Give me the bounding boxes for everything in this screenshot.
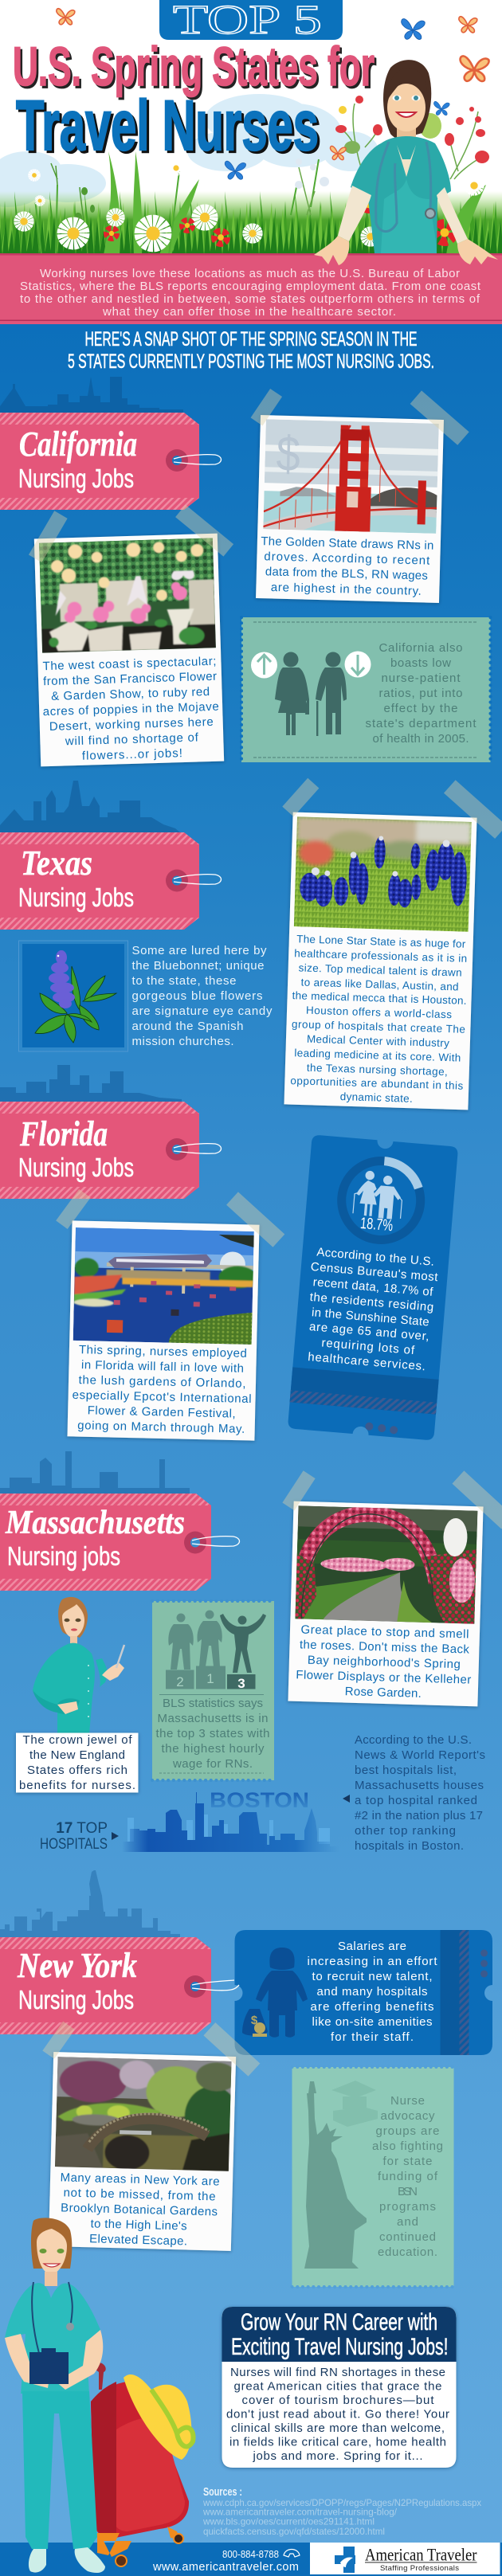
header: white spring meadow panel	[0, 0, 502, 255]
caption: in Florida will fall in love with	[81, 1358, 244, 1376]
advocacy text: advocacy	[381, 2109, 435, 2123]
advocacy text: Nurse	[390, 2094, 425, 2108]
icon: telephone	[284, 2549, 300, 2557]
hospital ranking text: Massachusetts houses	[355, 1779, 484, 1792]
boston skyline with label: BOSTON	[210, 1788, 309, 1812]
donut chart: 18.7%: 18.7%	[359, 1215, 394, 1235]
intro pink band	[0, 253, 502, 324]
sources: Sources :	[203, 2485, 242, 2499]
caption	[296, 1623, 473, 1702]
caption: size. Top medical talent is drawn	[298, 961, 462, 979]
stems and tulips	[295, 96, 489, 215]
icon: podium figures: 3	[237, 1676, 245, 1691]
texas tag	[0, 832, 222, 930]
bluebonnet text: gorgeous blue flowers	[132, 989, 263, 1003]
caption: Medical Center with industry	[307, 1033, 449, 1049]
thread from tag	[192, 1980, 239, 1991]
caption: Desert, working nurses here	[49, 715, 214, 734]
massachusetts tag	[0, 1494, 239, 1591]
caption: the medical mecca that is Houston.	[292, 989, 467, 1007]
bluebonnet text	[132, 944, 273, 1048]
california skyline	[0, 377, 183, 413]
hospital ranking text	[355, 1733, 485, 1853]
caption	[260, 534, 434, 598]
boston skyline with label	[122, 1788, 339, 1852]
hospital ranking text: a top hospital ranked	[355, 1794, 477, 1807]
salaries text: and many hospitals	[317, 1985, 427, 1999]
nurse body	[5, 2218, 105, 2573]
polaroid: flower show	[27, 503, 240, 767]
caption: Great place to stop and smell	[300, 1623, 469, 1642]
caption: to the High Line's	[90, 2217, 187, 2233]
ratio text: effect by the	[384, 702, 457, 715]
top 5 badge	[159, 0, 343, 43]
ticket text	[303, 1245, 440, 1374]
caption: Bay neighborhood's Spring	[308, 1654, 461, 1671]
nurse caption box: The crown jewel of	[22, 1733, 132, 1747]
bluebonnet text: to the state, these	[132, 974, 236, 988]
cta body: in fields like critical care, home health	[229, 2436, 446, 2449]
caption: The west coast is spectacular;	[42, 655, 217, 673]
clouds	[0, 94, 378, 207]
photo: kelleher rose garden	[295, 1505, 478, 1624]
advocacy text: programs	[379, 2200, 436, 2214]
ticket text: healthcare services.	[308, 1350, 426, 1373]
icon: elderly couple	[353, 1169, 404, 1220]
caption	[289, 933, 469, 1106]
icon: nurse and patient figures	[275, 652, 347, 736]
icon: statue of liberty	[304, 2081, 367, 2269]
footer contact	[152, 2548, 300, 2574]
tape	[29, 511, 68, 562]
cta body: jobs and more. Spring for it...	[252, 2449, 422, 2463]
ratio text: boasts low	[390, 656, 451, 670]
ratio text: California also	[379, 641, 462, 655]
advocacy text: funding of	[378, 2170, 438, 2183]
icon: podium figures: 2	[176, 1674, 184, 1689]
icon: blue cross	[335, 2547, 355, 2573]
ticket text: recent data, 18.7% of	[312, 1275, 434, 1299]
butterflies	[57, 9, 489, 179]
arrow: right to boston skyline	[112, 1832, 119, 1840]
caption: the roses. Don't miss the Back	[300, 1638, 470, 1657]
salaries text: are offering benefits	[311, 2000, 433, 2014]
wage text: the top 3 states with	[156, 1727, 269, 1740]
green card: top 3 wage podium	[152, 1601, 274, 1780]
advocacy text: groups are	[376, 2124, 440, 2138]
wage text	[156, 1697, 269, 1771]
travel nurse with luggage illustration	[5, 2218, 194, 2573]
donut chart: 18.7%	[339, 1158, 424, 1243]
texas tag: Nursing Jobs	[18, 883, 134, 912]
ticket text: in the Sunshine State	[311, 1306, 429, 1329]
bluebonnet illustration panel	[19, 941, 273, 1051]
caption: healthcare professionals as it is in	[294, 947, 467, 965]
american traveler logo: American Traveler	[365, 2544, 477, 2565]
title	[13, 36, 376, 167]
ratio text: nurse-patient	[381, 671, 461, 685]
title: Travel Nurses	[16, 85, 319, 165]
ratio text: ratios, put into	[379, 687, 462, 700]
american traveler logo: Staffing Professionals	[380, 2564, 459, 2573]
caption: the Texas nursing shortage,	[307, 1062, 448, 1078]
footer contact: 800-884-8788	[222, 2548, 279, 2560]
ratio text: state's department	[365, 717, 477, 730]
tape	[282, 778, 319, 816]
ratio text	[365, 641, 477, 746]
intro text: Working nurses love these locations as much as the U.S. Bureau of Labor	[40, 267, 460, 280]
advocacy text: education.	[378, 2245, 437, 2259]
advocacy text: continued	[379, 2230, 436, 2244]
ticket text: are age 65 and over,	[308, 1320, 429, 1344]
caption: dynamic state.	[340, 1090, 413, 1105]
tape	[42, 2022, 75, 2059]
hospitals label: 17 TOP	[56, 1820, 108, 1837]
massachusetts tag: Massachusetts	[5, 1505, 185, 1541]
new york tag: New York	[17, 1946, 137, 1985]
luggage	[84, 2363, 194, 2566]
caption: Flower & Garden Festival,	[88, 1403, 236, 1421]
call to action box	[222, 2307, 456, 2468]
green card: nurse-patient ratios	[241, 617, 491, 762]
footer contact: www.americantraveler.com	[152, 2561, 299, 2574]
caption: Houston offers a world-class	[306, 1004, 452, 1020]
bluebonnet text: around the Spanish	[132, 1020, 244, 1033]
hospital ranking text: News & World Report's	[355, 1748, 485, 1762]
hospital ranking text: best hospitals list,	[355, 1764, 457, 1777]
intro text: what they can offer those in the healthcare sector.	[102, 305, 396, 319]
advocacy text: BSN	[398, 2185, 418, 2198]
new york tag: Nursing Jobs	[18, 1985, 134, 2014]
photo: bluebonnet field	[293, 816, 472, 932]
tape	[56, 1189, 91, 1229]
sources: www.americantraveler.com/travel-nursing-blog/	[202, 2506, 398, 2517]
cta heading	[231, 2309, 448, 2360]
wage text: Massachusetts is in	[158, 1712, 268, 1725]
caption: to areas like Dallas, Austin, and	[300, 976, 459, 993]
florida tag	[0, 1102, 222, 1199]
caption: flowers...or jobs!	[82, 746, 182, 763]
caption: leading medicine at its core. With	[294, 1047, 461, 1064]
polaroid: epcot garden	[51, 1188, 285, 1441]
caption: are highest in the country.	[271, 581, 422, 598]
massachusetts skyline	[0, 1451, 190, 1494]
caption: will find no shortage of	[65, 730, 199, 748]
florida tag: Nursing Jobs	[18, 1153, 134, 1182]
hospital ranking text: #2 in the nation plus 17	[355, 1809, 483, 1822]
photo: epcot flower festival	[73, 1227, 254, 1345]
caption: Brooklyn Botanical Gardens	[61, 2201, 218, 2218]
cta body	[226, 2366, 449, 2463]
cta body: Nurses will find RN shortages in these	[230, 2366, 445, 2379]
icon: arrow up and down circles	[251, 652, 371, 679]
hospital ranking text: other top ranking	[355, 1824, 456, 1838]
section intro heading	[68, 328, 434, 373]
caption: droves. According to recent	[264, 550, 430, 568]
nurse caption box: States offers rich	[27, 1764, 127, 1777]
green card: nurse advocacy	[292, 2067, 454, 2287]
ticket: new york salaries	[192, 1930, 492, 2055]
california tag	[0, 413, 222, 510]
icon: worker with money bag	[242, 1948, 308, 2038]
intro text: Statistics, where the BLS reports encouraging employment data. From one coast	[20, 280, 481, 293]
icon: graduation cap and books	[331, 2081, 378, 2127]
photo: golden gate bridge	[263, 419, 439, 534]
caption: opportunities are abundant in this	[290, 1075, 464, 1092]
salaries text: to recruit new talent,	[312, 1970, 432, 1983]
texas skyline	[0, 781, 180, 832]
hospitals label	[40, 1820, 108, 1853]
polaroid: texas bluebonnets	[273, 775, 502, 1111]
advocacy text: for state	[382, 2155, 432, 2168]
salaries text: like on-site amenities	[312, 2015, 432, 2029]
sources: quickfacts.census.gov/qfd/states/12000.html	[203, 2526, 385, 2537]
nurse caption box: the New England	[29, 1748, 125, 1762]
caption: from the San Francisco Flower	[43, 670, 217, 688]
caption	[41, 655, 221, 764]
footer bar	[0, 2543, 502, 2576]
hospital ranking text: hospitals in Boston.	[355, 1839, 464, 1853]
title: Travel Nurses	[18, 88, 321, 167]
icon: podium figures	[166, 1611, 266, 1691]
wage text: BLS statistics says	[163, 1697, 263, 1710]
caption	[72, 1343, 253, 1436]
tape	[251, 389, 282, 425]
polaroid: brooklyn botanical garden	[37, 2018, 261, 2252]
nurse caption box	[16, 1733, 139, 1792]
intro text	[20, 267, 481, 319]
caption: Flower Displays or the Kelleher	[296, 1668, 472, 1687]
california tag: Nursing Jobs	[18, 464, 134, 493]
bluebonnet text: mission churches.	[132, 1035, 234, 1048]
caption: Elevated Escape.	[89, 2232, 187, 2249]
caption: Many areas in New York are	[60, 2171, 220, 2189]
photo: potted flowers	[39, 538, 216, 653]
ticket text: According to the U.S.	[316, 1245, 435, 1269]
new york skyline	[0, 1870, 180, 1937]
tape	[282, 1470, 316, 1510]
caption: the lush gardens of Orlando,	[78, 1373, 246, 1391]
cta body: cover of tourism brochures—but	[242, 2394, 434, 2407]
photo: japanese bridge	[55, 2057, 231, 2171]
wage text: the highest hourly	[161, 1742, 265, 1756]
salaries text: Salaries are	[338, 1940, 406, 1953]
massachusetts tag: Nursing jobs	[7, 1541, 120, 1571]
caption: data from the BLS, RN wages	[265, 565, 428, 583]
caption: acres of poppies in the Mojave	[43, 700, 219, 718]
hospitals label: HOSPITALS	[40, 1836, 108, 1853]
caption: & Garden Show, to ruby red	[51, 685, 210, 703]
advocacy text: also fighting	[372, 2139, 443, 2153]
salaries text: for their staff.	[331, 2030, 414, 2044]
sources: www.cdph.ca.gov/services/DPOPP/regs/Pages/N2PRegulations.aspx	[202, 2497, 481, 2508]
caption: The Lone Star State is as huge for	[296, 933, 466, 950]
header nurse illustration	[314, 60, 498, 265]
advocacy text	[372, 2094, 443, 2259]
cta body: don't just read about it. Go there! Your	[226, 2407, 449, 2421]
polaroid: rose garden	[276, 1466, 502, 1707]
icon: bluebonnet flower	[35, 950, 116, 1043]
florida tag: Florida	[19, 1114, 108, 1153]
icon: podium figures: 1	[206, 1671, 214, 1686]
nurse caption box: benefits for nurses.	[19, 1779, 135, 1792]
sources: www.bls.gov/oes/current/oes291141.html	[202, 2515, 375, 2527]
ticket text: requiring lots of	[321, 1336, 416, 1357]
ticket text: the residents residing	[309, 1290, 434, 1314]
caption: This spring, nurses employed	[79, 1343, 247, 1360]
hospital ranking text: According to the U.S.	[355, 1733, 472, 1747]
bluebonnet text: Some are lured here by	[132, 944, 267, 957]
california tag: California	[19, 425, 137, 464]
icon: worker with money bag: $	[251, 2014, 258, 2027]
advocacy text: and	[397, 2215, 418, 2229]
ratio text: of health in 2005.	[373, 732, 469, 746]
texas tag: Texas	[21, 844, 92, 883]
bluebonnet text: the Bluebonnet; unique	[132, 959, 265, 973]
grass	[0, 151, 502, 255]
caption	[58, 2171, 220, 2249]
cta body: great American cities that grace the	[234, 2380, 441, 2393]
polaroid: golden gate	[246, 386, 470, 604]
arrow: left to boston skyline	[343, 1795, 350, 1803]
caption: Rose Garden.	[345, 1685, 422, 1701]
caption: group of hospitals that create The	[292, 1018, 465, 1035]
caption: not to be missed, from the	[63, 2186, 216, 2203]
cta body: clinical skills are more than welcome,	[231, 2421, 445, 2435]
new york tag	[0, 1937, 211, 2034]
ticket: florida age statistic	[288, 1134, 458, 1441]
salaries text: increasing in an effort	[308, 1955, 437, 1968]
massachusetts nurse illustration	[33, 1597, 124, 1734]
caption: The Golden State draws RNs in	[261, 534, 434, 553]
daisies and red flowers	[18, 162, 480, 246]
caption: going on March through May.	[77, 1419, 245, 1436]
sources	[202, 2485, 481, 2537]
ticket text: Census Bureau's most	[310, 1260, 439, 1284]
bluebonnet text: are signature eye candy	[132, 1004, 273, 1018]
intro text: to the other and nestled in between, some states outperform others in terms of	[20, 292, 480, 306]
photo: golden gate bridge: $	[276, 427, 301, 482]
wage text: wage for RNs.	[172, 1757, 253, 1771]
american traveler logo	[310, 2543, 500, 2574]
salaries text	[308, 1940, 437, 2044]
caption: especially Epcot's International	[72, 1388, 252, 1406]
florida skyline	[0, 1065, 182, 1102]
